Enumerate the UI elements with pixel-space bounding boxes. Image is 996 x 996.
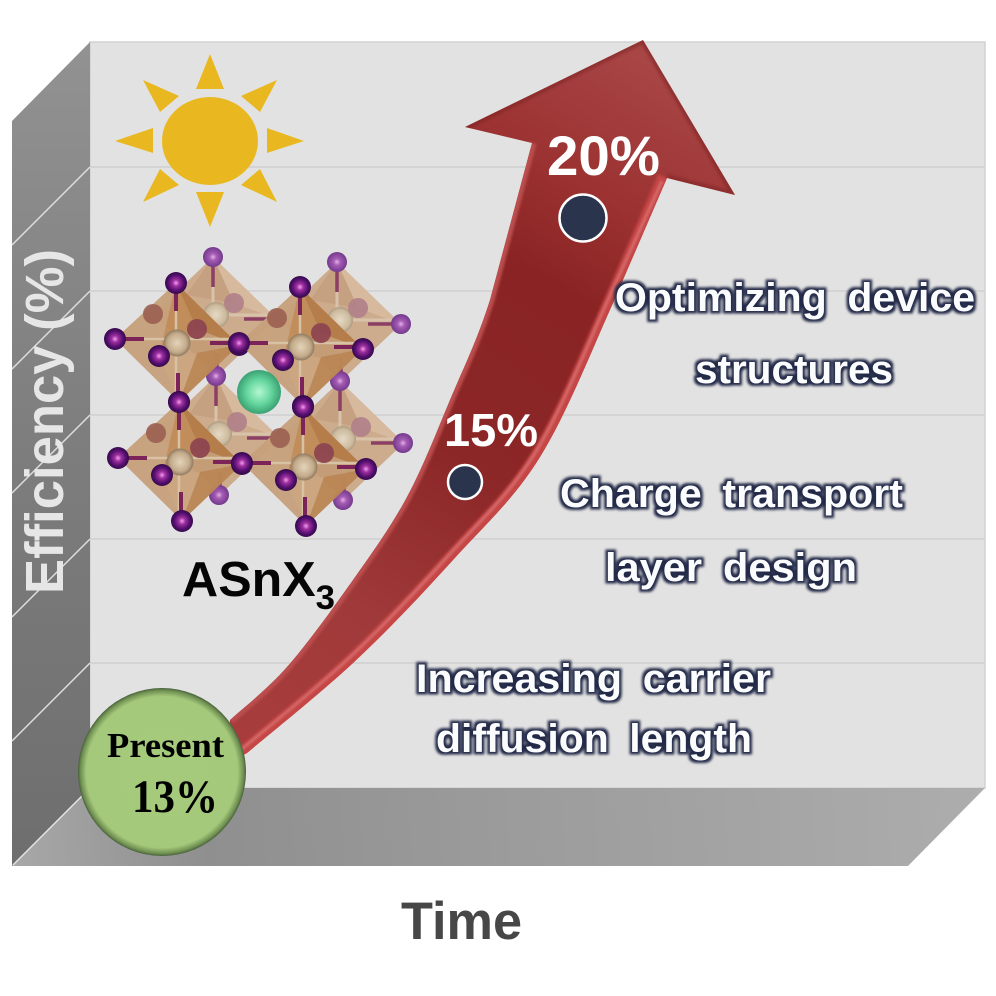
strategy text: charge transport layer design: Charge transport xyxy=(560,472,903,516)
chart left wall xyxy=(12,42,90,866)
strategy text: optimizing device structures xyxy=(615,276,975,392)
strategy text: increasing carrier diffusion length: Increasing carrier xyxy=(416,657,771,701)
formula label: ASnX3: ASnX xyxy=(182,553,313,607)
strategy text: charge transport layer design: layer design xyxy=(605,546,857,590)
icon: sun xyxy=(115,54,304,227)
milestone label: 15%: 15% xyxy=(444,404,538,456)
strategy text: optimizing device structures: Optimizing device xyxy=(615,276,975,320)
present efficiency badge: 13% xyxy=(132,771,218,823)
chart floor xyxy=(12,788,985,866)
strategy text: increasing carrier diffusion length: diffusion length xyxy=(436,717,752,761)
milestone label: 20%: 20% xyxy=(547,124,660,187)
x axis label: Time: Time xyxy=(401,892,522,951)
perovskite crystal structure xyxy=(104,247,413,537)
milestone marker: 15% xyxy=(448,465,482,499)
present efficiency badge: Present xyxy=(107,726,224,765)
strategy text: optimizing device structures: structures xyxy=(695,348,893,392)
growth arrow xyxy=(220,40,735,765)
strategy text: charge transport layer design xyxy=(560,472,903,590)
chart back wall xyxy=(90,42,985,788)
formula label: ASnX3: 3 xyxy=(316,579,335,617)
strategy text: increasing carrier diffusion length xyxy=(416,657,771,761)
y axis label: Efficiency (%): Efficiency (%) xyxy=(15,249,75,594)
present efficiency badge xyxy=(78,688,246,856)
milestone marker: 20% xyxy=(560,194,606,242)
